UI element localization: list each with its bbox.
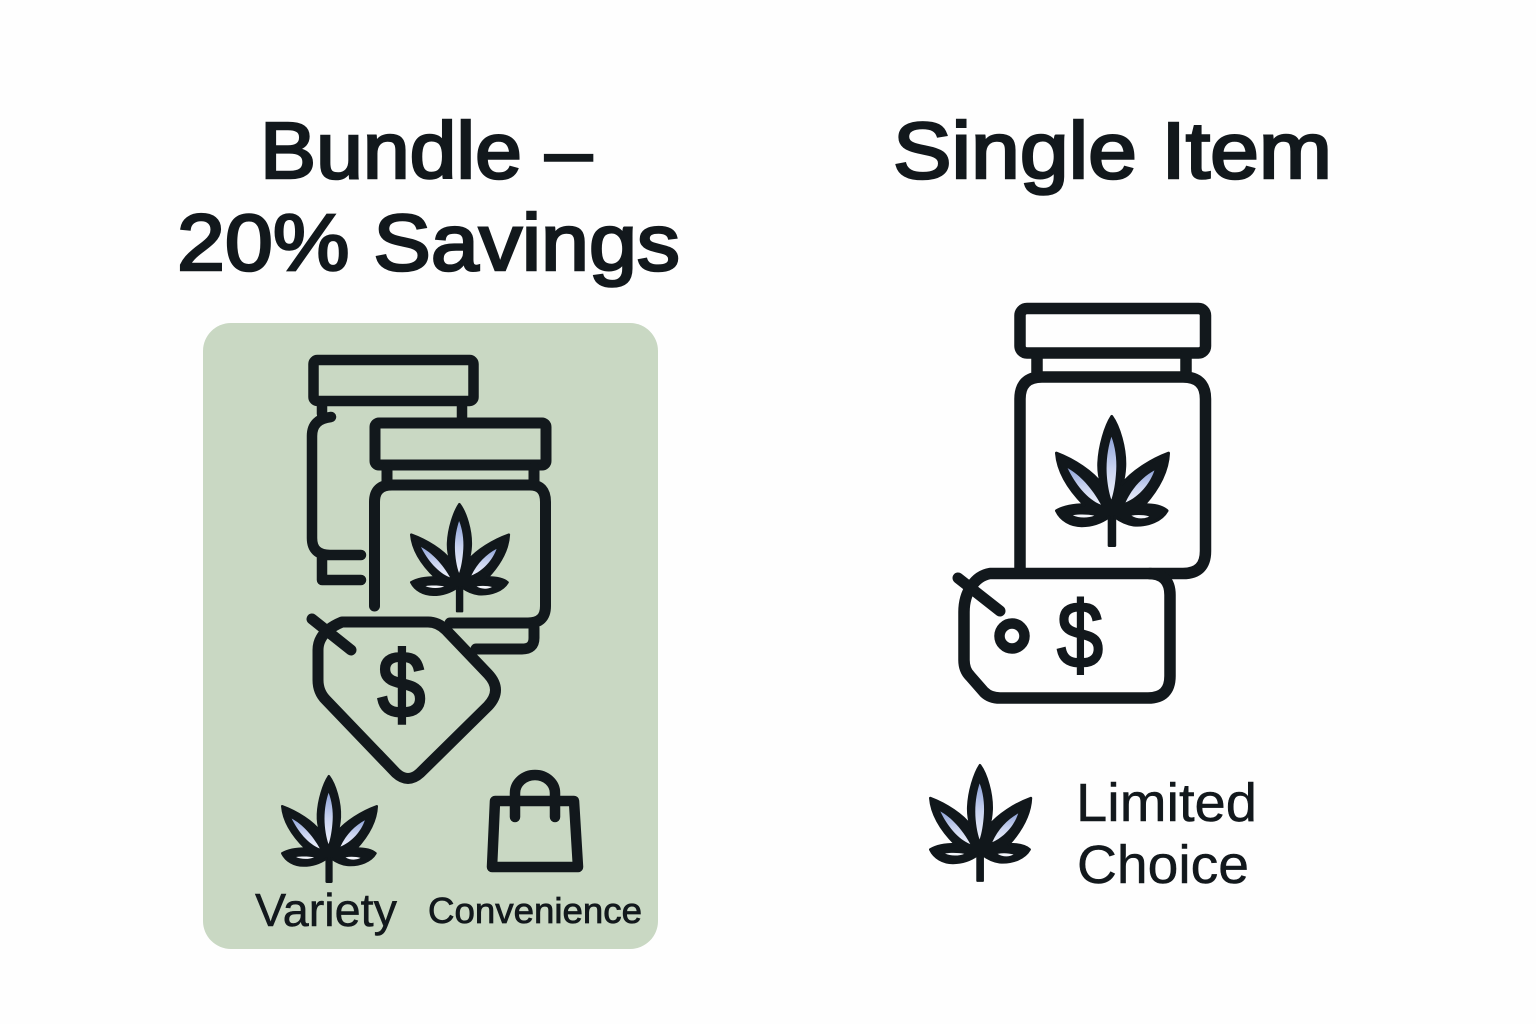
icon: single price tag [958,574,1170,698]
label: limited choice [1076,773,1257,895]
icon: leaf on front jar [411,504,509,611]
icon: back jar [312,360,474,580]
icon: single jar [1020,308,1206,574]
icon: single price tag: $ [1057,582,1103,687]
panel: bundle [203,323,658,949]
label: limited choice: Limited [1076,773,1257,833]
label: variety: Variety [255,884,397,936]
heading: bundle [177,106,680,287]
heading: single item: Single Item [893,106,1332,195]
icon: price tag [312,619,496,778]
icon: shopping bag [492,775,578,867]
label: convenience: Convenience [428,890,642,931]
icon: variety leaf [282,776,377,882]
icon: price tag: $ [378,632,425,736]
icon: front jar [374,423,546,649]
panel background [203,323,658,949]
icon: limited choice leaf [930,765,1031,881]
heading: bundle: Bundle – [260,106,593,195]
heading: bundle: 20% Savings [177,198,680,287]
icon: leaf on single jar [1056,416,1169,546]
label: limited choice: Choice [1077,835,1249,895]
